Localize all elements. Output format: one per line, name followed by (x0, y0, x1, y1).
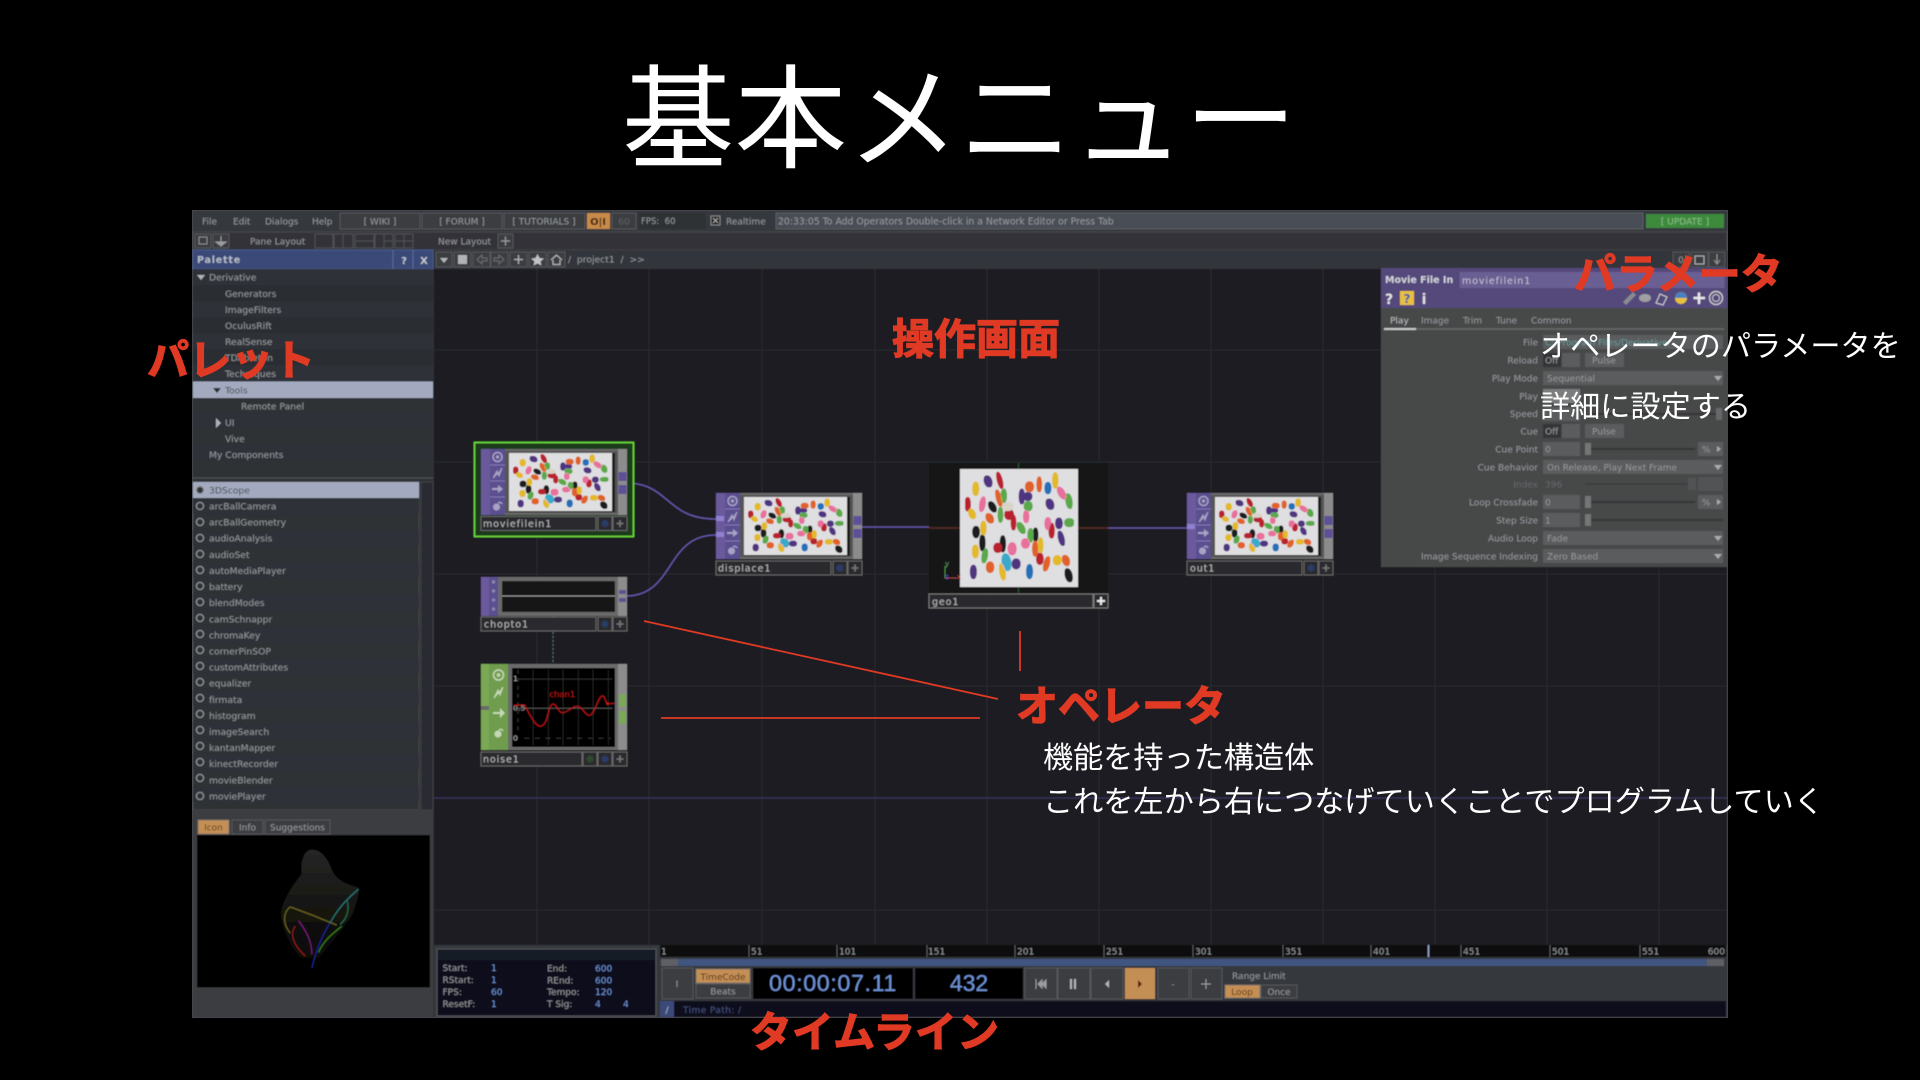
component list: battery (209, 582, 243, 593)
parameter rows: Audio Loop (1488, 534, 1538, 544)
noise graph: chan1 (549, 689, 575, 699)
timeline ruler: 101 (839, 948, 856, 958)
node: displace1: displace1 (718, 564, 771, 574)
parameter header (1381, 268, 1727, 308)
parameter rows: Pulse (1592, 356, 1616, 366)
component list: histogram (209, 711, 256, 722)
timeline stats: Start: (442, 964, 468, 974)
parameter rows: Cue Point (1495, 446, 1538, 456)
text: parameter description: オペレータのパラメータを (1540, 330, 1901, 364)
palette tree: Tools (224, 386, 248, 396)
timeline ruler: 401 (1373, 948, 1390, 958)
timeline stats: 120 (595, 988, 612, 998)
component list: audioAnalysis (209, 534, 273, 545)
top menu bar: 20:33:05 To Add Operators Double-click in a Network Editor or Press Tab (778, 216, 1114, 228)
timeline stats (437, 949, 656, 1016)
parameter rows: % (1702, 446, 1711, 456)
preview tabs (198, 820, 330, 834)
timeline stats: Tempo: (546, 988, 580, 998)
parameter rows: Off (1545, 356, 1559, 366)
node: moviefilein1: moviefilein1 (483, 519, 552, 530)
parameter header: moviefilein1 (1462, 276, 1531, 287)
noise graph (512, 669, 615, 746)
parameter header: Movie File In (1385, 275, 1453, 286)
timeline stats: 1 (491, 1000, 497, 1010)
parameter rows: Sequential (1547, 374, 1595, 384)
top menu bar: Help (312, 218, 333, 228)
component list: customAttributes (209, 663, 288, 674)
palette header: ? (401, 256, 407, 267)
parameter rows: % (1702, 498, 1711, 508)
parameter rows: Zero Based (1547, 552, 1598, 562)
timeline ruler: 351 (1285, 948, 1302, 958)
component list: arcBallCamera (209, 502, 276, 512)
top menu bar: [ WIKI ] (364, 218, 396, 228)
component list: autoMediaPlayer (209, 566, 286, 577)
parameter tabs: Image (1421, 316, 1450, 326)
component list: equalizer (209, 679, 252, 690)
parameter tabs: Trim (1462, 316, 1482, 326)
timeline ruler: 151 (928, 948, 945, 958)
parameter rows: Loop Crossfade (1469, 498, 1538, 508)
preview tabs: Icon (204, 824, 223, 834)
palette panel (193, 250, 434, 1017)
title: 基本メニュー (622, 57, 1297, 183)
palette tree: Techniques (224, 369, 276, 380)
timeline ruler: 251 (1106, 948, 1123, 958)
top menu bar: File (202, 218, 218, 228)
top menu bar: [ UPDATE ] (1661, 218, 1709, 228)
timeline ruler: 51 (751, 948, 762, 958)
timeline stats: 1 (491, 976, 497, 986)
node: chopto1: chopto1 (484, 620, 529, 630)
node: displace1 (716, 493, 862, 575)
palette header: Palette (197, 255, 241, 266)
annotation lines (644, 621, 1020, 718)
component list: chromaKey (209, 630, 261, 642)
parameter rows: 0 (1545, 446, 1551, 456)
top menu bar: [ TUTORIALS ] (512, 218, 576, 228)
parameter rows: Pulse (1592, 428, 1616, 438)
timeline stats: 600 (595, 976, 612, 986)
parameter rows (1421, 335, 1723, 563)
component list: kantanMapper (209, 743, 276, 754)
top menu bar: Dialogs (265, 218, 299, 228)
parameter rows: File (1523, 338, 1538, 348)
timeline ruler (660, 945, 1726, 966)
parameter rows: On Release, Play Next Frame (1547, 464, 1677, 474)
parameter panel (1381, 268, 1727, 567)
timeline transport: Range Limit (1232, 972, 1286, 982)
timeline transport: Loop (1231, 988, 1253, 998)
label: timeline: タイムライン (750, 1009, 999, 1056)
timeline ruler: 501 (1552, 948, 1569, 958)
parameter header: ? (1385, 292, 1393, 308)
component list: kinectRecorder (209, 759, 278, 770)
parameter tabs (1384, 316, 1724, 329)
timeline transport: Once (1267, 988, 1291, 998)
top menu bar (193, 211, 1727, 232)
timeline stats: 60 (491, 988, 503, 998)
wires (553, 483, 1187, 662)
timeline stats: ResetF: (442, 1000, 475, 1010)
timeline ruler: 551 (1642, 948, 1659, 958)
palette tree: TDAbleton (224, 353, 273, 364)
text: operator description: 機能を持った構造体 (1043, 741, 1314, 775)
palette tree: Derivative (209, 272, 257, 284)
layout toolbar: Pane Layout (250, 238, 306, 248)
timeline stats: T Sig: (546, 1000, 572, 1010)
timeline transport: I (676, 980, 678, 990)
parameter rows: 0 (1545, 498, 1551, 508)
parameter rows: Speed (1510, 410, 1538, 420)
parameter rows: Off (1545, 428, 1559, 438)
component list: camSchnappr (209, 614, 272, 626)
node: chopto1 (481, 577, 627, 631)
timeline stats: 600 (595, 964, 612, 974)
node: geo1: y (945, 560, 949, 568)
parameter rows: Cue (1520, 428, 1538, 438)
timeline ruler: 1 (661, 948, 667, 958)
timeline ruler: 451 (1463, 948, 1480, 958)
timeline transport (662, 968, 1297, 999)
parameter rows: C:/Program Files/Derivative/ (1545, 338, 1671, 348)
palette tree: OculusRift (225, 321, 272, 332)
component list: audioSet (209, 550, 250, 561)
top menu bar: Realtime (726, 218, 766, 228)
timeline ruler: 301 (1195, 948, 1212, 958)
time path bar: / (665, 1006, 669, 1016)
parameter rows: Cue Behavior (1478, 464, 1538, 474)
parameter header: ? (1404, 292, 1411, 306)
parameter tabs: Play (1390, 316, 1409, 326)
component list: imageSearch (209, 727, 269, 738)
component list: cornerPinSOP (209, 646, 271, 658)
text: operator description (1043, 741, 1824, 819)
palette tree: ImageFilters (225, 305, 282, 316)
parameter tabs: Common (1531, 316, 1572, 326)
noise graph: 0 (513, 733, 518, 742)
node: out1 (1187, 493, 1333, 575)
timeline stats: 4 (623, 1000, 629, 1010)
timeline stats: FPS: (442, 988, 462, 998)
network toolbar (434, 250, 1727, 269)
timeline stats: 1 (491, 964, 497, 974)
node: noise1: noise1 (483, 754, 520, 766)
timeline stats: RStart: (442, 976, 474, 986)
timeline transport: Beats (710, 988, 736, 998)
timeline ruler: 600 (1708, 948, 1725, 958)
component list: firmata (209, 695, 242, 706)
component list: blendModes (209, 598, 265, 609)
noise graph: 0.5 (513, 704, 526, 713)
network editor (434, 250, 1727, 945)
parameter rows: 396 (1545, 480, 1562, 490)
palette tree: Vive (225, 434, 245, 445)
screenshot: TouchDesigner UI (192, 210, 1728, 1018)
noise graph: 1 (513, 674, 518, 683)
network toolbar: 0 (1678, 256, 1684, 266)
palette tree (193, 269, 433, 461)
preview: 3D scope icon (196, 834, 430, 988)
preview tabs: Suggestions (270, 824, 325, 834)
layout toolbar (193, 232, 1727, 250)
timeline ruler: 201 (1017, 948, 1034, 958)
node: out1: out1 (1190, 564, 1215, 574)
timeline transport: TimeCode (699, 973, 746, 983)
timeline stats: REnd: (547, 976, 573, 986)
component list: arcBallGeometry (209, 518, 287, 529)
timeline transport: - (1171, 980, 1175, 990)
top menu bar: Edit (233, 218, 251, 228)
parameter rows: Play (1519, 392, 1539, 402)
top menu bar: FPS: 60 (641, 217, 676, 227)
time path bar: Time Path: / (682, 1006, 742, 1016)
node: noise1 (481, 664, 627, 766)
parameter rows: Index (1513, 480, 1539, 490)
parameter rows: 1 (1545, 516, 1551, 526)
parameter rows: Step Size (1496, 516, 1538, 526)
palette header: X (420, 256, 428, 267)
timeline stats: End: (547, 964, 567, 974)
parameter rows: Play Mode (1492, 374, 1538, 384)
parameter rows: Image Sequence Indexing (1421, 552, 1538, 562)
palette tree: Generators (225, 289, 277, 300)
time path bar (660, 1001, 1726, 1017)
top menu bar: 60 (618, 218, 630, 228)
top menu bar: O|I (590, 217, 606, 228)
component list (193, 482, 433, 810)
node: geo1: z (945, 573, 949, 581)
palette tree: UI (225, 418, 234, 429)
node: geo1 (929, 463, 1108, 608)
component list: 3DScope (209, 486, 250, 496)
component list: moviePlayer (209, 792, 266, 802)
label: operation screen: 操作画面 (892, 316, 1060, 363)
parameter rows: Reload (1507, 356, 1538, 366)
text: parameter description (1540, 330, 1901, 424)
top menu bar: [ FORUM ] (439, 218, 485, 228)
palette tree: RealSense (225, 337, 273, 348)
palette tree: Remote Panel (241, 402, 304, 412)
palette tree: My Components (209, 450, 284, 461)
palette header (193, 250, 433, 269)
node: geo1: geo1 (932, 597, 959, 608)
preview tabs: Info (239, 824, 257, 834)
timeline transport: 432 (950, 970, 988, 996)
label: operators: オペレータ (1016, 683, 1226, 730)
parameter rows: Fade (1547, 534, 1569, 544)
text: parameter description: 詳細に設定する (1540, 390, 1751, 424)
layout toolbar: New Layout (438, 238, 492, 248)
timeline transport: 00:00:07.11 (769, 970, 897, 996)
label: palette: パレット (147, 337, 315, 384)
timeline stats: 4 (595, 1000, 601, 1010)
node: geo1: x (957, 573, 961, 581)
node: moviefilein1 (474, 442, 634, 536)
component list: movieBlender (209, 775, 273, 786)
text: operator description: これを左から右につなげていくことでプログラムしていく (1043, 785, 1824, 819)
parameter header: i (1422, 292, 1426, 308)
timeline (434, 945, 1727, 1017)
parameter tabs: Tune (1495, 316, 1518, 326)
network toolbar: / project1 / >> (568, 254, 645, 266)
label: parameters: パラメータ (1574, 251, 1783, 298)
